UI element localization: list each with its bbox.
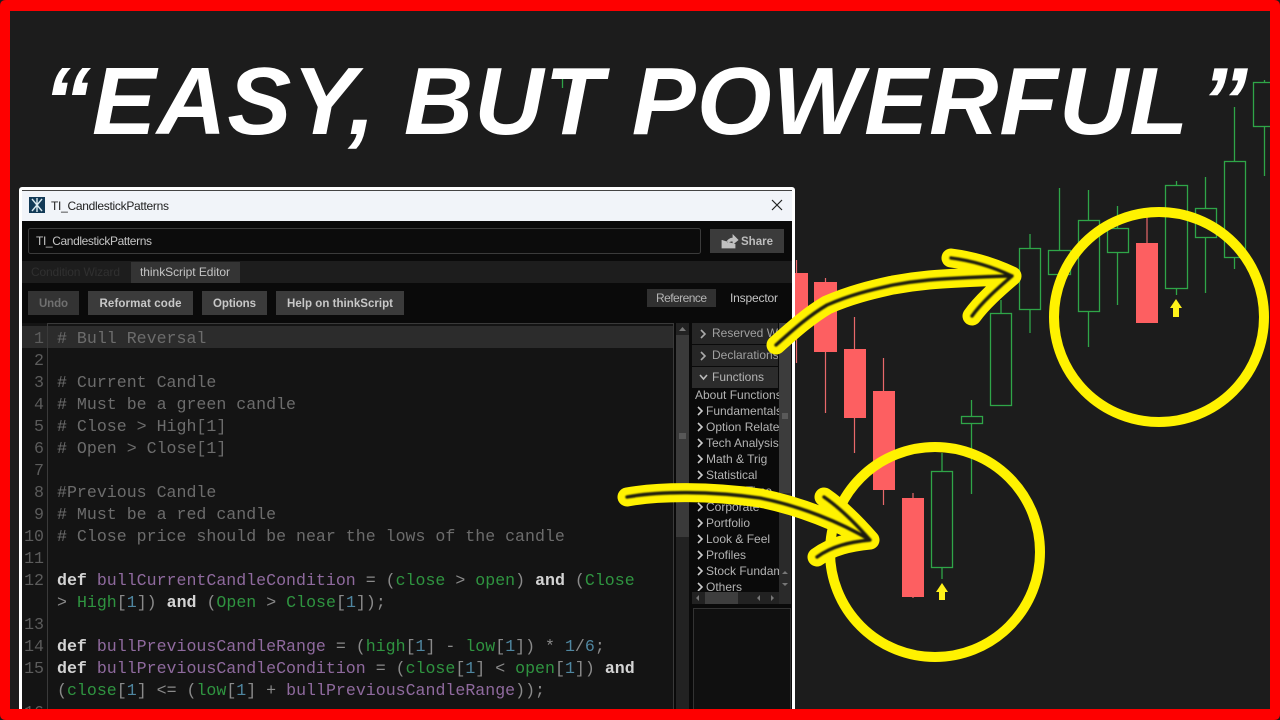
function list: Stock Fundamentals (706, 564, 815, 578)
later green candles (562, 75, 1276, 293)
function list: Option Related (706, 420, 786, 434)
candlestick chart (562, 75, 1276, 598)
toolbar: Reformat code (100, 298, 182, 310)
signal arrow: lower (936, 583, 948, 600)
function list: Math & Trig (706, 452, 767, 466)
collapsed section headers: Declarations (712, 348, 779, 362)
red candles, falling leg (795, 260, 895, 505)
upper pattern candles (1136, 181, 1188, 323)
code text: def bullPreviousCandleCondition = (close[1] < open[1]) and (57, 659, 635, 678)
toolbar: Undo (39, 298, 68, 310)
rising green candles (962, 188, 1128, 494)
list scrollbars (692, 323, 791, 604)
code text: # Bull Reversal (57, 329, 206, 348)
line numbers (25, 332, 44, 709)
function list: Portfolio (706, 516, 750, 530)
function list: Corporate (706, 500, 760, 514)
description box (694, 608, 790, 710)
line numbers: 6 (34, 439, 44, 458)
toolbar: Reference (656, 291, 707, 305)
line numbers: 8 (34, 483, 44, 502)
highlight circle: upper (1054, 212, 1264, 422)
reference panel (692, 323, 791, 709)
line numbers: 10 (24, 527, 44, 546)
line numbers: 15 (24, 659, 44, 678)
line numbers: 2 (34, 351, 44, 370)
line numbers: 7 (34, 461, 44, 480)
function list: Statistical (706, 468, 757, 482)
tab strip (22, 261, 792, 283)
code text: # Current Candle (57, 373, 216, 392)
signal arrow: upper (1170, 299, 1182, 317)
tab strip: thinkScript Editor (140, 265, 230, 279)
icon: close (772, 200, 782, 210)
code text: #Previous Candle (57, 483, 216, 502)
line numbers: 12 (24, 571, 44, 590)
function list: Others (706, 580, 742, 594)
code text: # Close > High[1] (57, 417, 226, 436)
function list: Profiles (706, 548, 746, 562)
line numbers: 9 (34, 505, 44, 524)
code text: # Close price should be near the lows of the candle (57, 527, 565, 546)
name input (28, 228, 700, 254)
function list: Look & Feel (706, 532, 770, 546)
function list: About Functions (695, 388, 782, 402)
code text: (close[1] <= (low[1] + bullPreviousCandleRange)); (57, 681, 545, 700)
hand-drawn arrow: to upper candle (776, 258, 1012, 345)
collapsed section headers: Reserved Words (712, 326, 801, 340)
line numbers: 13 (24, 615, 44, 634)
name input: TI_CandlestickPatterns (36, 234, 152, 248)
line numbers: 11 (24, 549, 44, 568)
collapsed section headers: Functions (712, 370, 764, 384)
line numbers: 1 (34, 329, 44, 348)
function list: Date & Time (706, 484, 772, 498)
line numbers: 14 (24, 637, 44, 656)
function list (695, 390, 779, 591)
icon: app logo (29, 197, 45, 213)
title bar (22, 190, 792, 221)
toolbar: Help on thinkScript (287, 298, 393, 310)
line numbers: 4 (34, 395, 44, 414)
line numbers: 3 (34, 373, 44, 392)
code text: def bullPreviousCandleRange = (high[1] - low[1]) * 1/6; (57, 637, 605, 656)
toolbar: Inspector (730, 291, 778, 305)
lower pattern candles (902, 453, 952, 598)
share button: Share (741, 236, 773, 248)
toolbar (28, 289, 778, 315)
title: ” (1200, 48, 1248, 155)
tab strip: Condition Wizard (31, 265, 120, 279)
hand-drawn arrow: to lower candle (627, 493, 870, 557)
code text: # Must be a green candle (57, 395, 296, 414)
code text: def bullCurrentCandleCondition = (close > open) and (Close (57, 571, 635, 590)
code text (57, 329, 635, 700)
code text: # Open > Close[1] (57, 439, 226, 458)
toolbar: Options (213, 298, 256, 310)
code text: # Must be a red candle (57, 505, 276, 524)
function list: Tech Analysis (706, 436, 779, 450)
collapsed section headers (692, 323, 778, 388)
title: “EASY, BUT POWERFUL (43, 48, 1188, 155)
line numbers: 5 (34, 417, 44, 436)
editor scrollbar (676, 323, 689, 709)
window title: TI_CandlestickPatterns (51, 199, 169, 213)
function list: Fundamentals (706, 404, 782, 418)
code editor (22, 323, 674, 720)
highlight circle: lower (830, 447, 1040, 657)
code text: > High[1]) and (Open > Close[1]); (57, 593, 386, 612)
share button (710, 229, 784, 253)
editor window (19, 187, 815, 720)
